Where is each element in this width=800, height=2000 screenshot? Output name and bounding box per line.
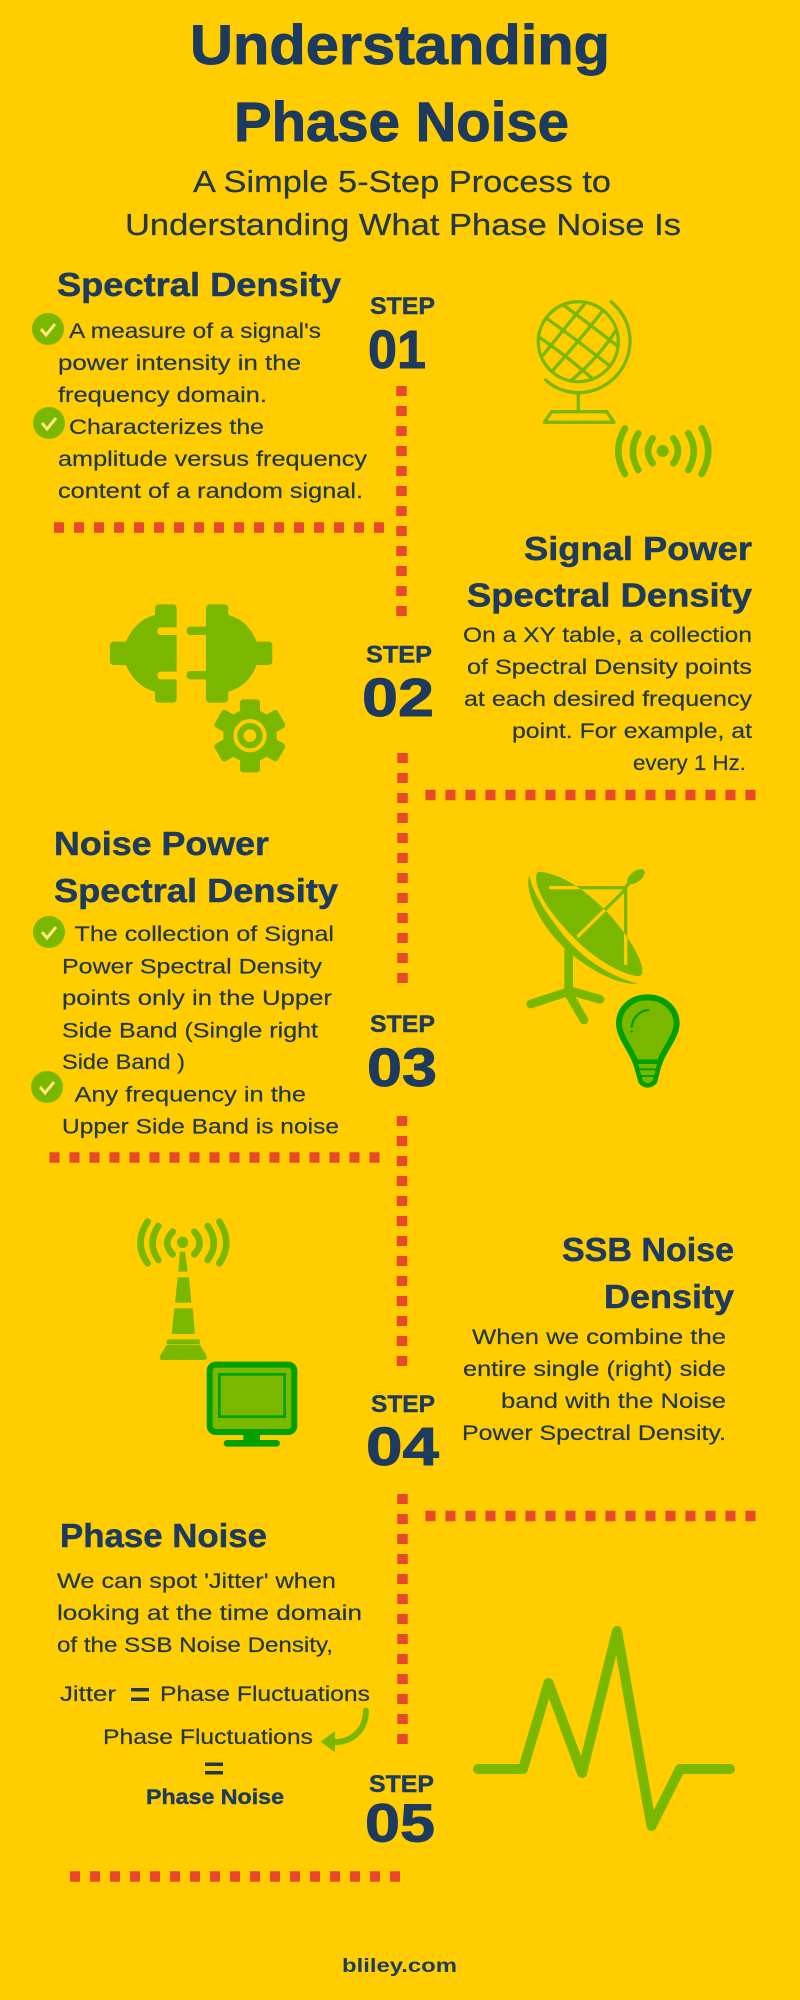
step 04 label: 04 (366, 1417, 439, 1477)
title: Phase Noise (234, 90, 569, 153)
equation: jitter equals phase fluctuations (60, 1683, 370, 1706)
text: step 4 body (462, 1326, 726, 1445)
arrow: curved green (322, 1711, 366, 1751)
heading: ssb noise density (562, 1231, 735, 1315)
step 02 label: 02 (362, 668, 434, 728)
step 04 label (366, 1391, 439, 1477)
step 05 label (365, 1771, 435, 1854)
step 02 label: STEP (366, 642, 432, 668)
text: step 3 body: Power Spectral Density (62, 956, 323, 978)
title: Understanding (190, 13, 610, 76)
step 02 label (362, 642, 434, 728)
icon: light bulb (619, 997, 677, 1085)
text: step 2 body (463, 624, 753, 775)
step 04 label: STEP (371, 1391, 435, 1418)
step 01 label: STEP (370, 293, 435, 320)
text: step 4 body: band with the Noise (501, 1390, 726, 1413)
text: step 2 body: at each desired frequency (464, 688, 753, 711)
text: step 2 body: On a XY table, a collection (463, 624, 752, 647)
text: step 1 body: frequency domain. (58, 384, 267, 407)
icon: pulse line (478, 1631, 730, 1826)
text: step 1 body: amplitude versus frequency (58, 448, 368, 471)
panel: step 2 signal power spectral density (110, 530, 753, 775)
text: step 5 body: We can spot 'Jitter' when (57, 1570, 336, 1593)
text: step 5 body: of the SSB Noise Density, (57, 1634, 333, 1657)
heading: ssb noise density: SSB Noise (562, 1231, 734, 1268)
heading: signal power spectral density (467, 530, 753, 614)
text: step 3 body (62, 923, 339, 1138)
text: step 2 body: every 1 Hz. (633, 752, 746, 775)
icon: globe (538, 302, 630, 422)
icon: check 1 (32, 313, 64, 345)
icon: check 3 (33, 916, 65, 948)
step 01 label (368, 293, 435, 380)
equation: jitter equals phase fluctuations: Phase Fluctuations (160, 1683, 370, 1706)
equation: jitter equals phase fluctuations: Jitter (60, 1683, 116, 1706)
heading: signal power spectral density: Spectral Density (467, 576, 753, 614)
icon: monitor (210, 1365, 294, 1447)
text: step 4 body: Power Spectral Density. (462, 1422, 726, 1445)
icon: radio tower (140, 1222, 226, 1360)
equation: phase fluctuations equals phase noise: Phase Noise (146, 1786, 284, 1809)
text: step 1 body: content of a random signal. (58, 480, 363, 503)
text: step 2 body: point. For example, at (512, 720, 752, 743)
text: step 1 body: Characterizes the (69, 416, 264, 439)
footer: website: bliley.com (342, 1956, 457, 1977)
heading: signal power spectral density: Signal Power (524, 530, 752, 567)
title (190, 13, 610, 153)
step 05 label: STEP (369, 1771, 434, 1798)
text: step 3 body: points only in the Upper (62, 987, 332, 1010)
text: step 1 body: A measure of a signal's (69, 320, 321, 343)
text: step 2 body: of Spectral Density points (467, 656, 752, 679)
text: step 4 body: When we combine the (472, 1326, 726, 1349)
step 05 label: 05 (365, 1794, 435, 1854)
step 03 label: STEP (370, 1011, 435, 1038)
text: step 1 body: power intensity in the (58, 352, 301, 375)
step 01 label: 01 (368, 320, 426, 380)
panel: step 1 spectral density (32, 266, 708, 503)
panel: step 4 ssb noise density (140, 1222, 735, 1477)
heading: phase noise: Phase Noise (60, 1517, 267, 1554)
step 03 label: 03 (367, 1038, 437, 1098)
text: step 4 body: entire single (right) side (463, 1358, 726, 1381)
icon: satellite dish (528, 866, 647, 1020)
text: step 3 body: The collection of Signal (74, 923, 334, 946)
heading: spectral density: Spectral Density (57, 266, 342, 303)
text: step 3 body: Side Band ) (62, 1051, 185, 1074)
text: step 5 body (57, 1570, 362, 1657)
text: step 3 body: Side Band (Single right (62, 1020, 318, 1042)
subtitle: A Simple 5-Step Process to (193, 164, 611, 199)
step 03 label (367, 1011, 437, 1098)
icon: plug connector (110, 604, 272, 703)
panel: step 5 phase noise (57, 1517, 730, 1854)
icon: signal waves (618, 428, 708, 474)
icon: check 2 (33, 407, 65, 439)
panel: step 3 noise power spectral density (31, 825, 677, 1138)
heading: noise power spectral density: Spectral Density (54, 872, 339, 909)
text: step 1 body (58, 320, 368, 503)
subtitle (125, 164, 681, 242)
equation: phase fluctuations equals phase noise (103, 1726, 313, 1809)
text: step 5 body: looking at the time domain (57, 1602, 362, 1625)
heading: ssb noise density: Density (604, 1278, 735, 1315)
heading: noise power spectral density: Noise Power (54, 825, 269, 862)
icon: check 4 (31, 1071, 63, 1103)
text: step 3 body: Any frequency in the (74, 1084, 306, 1106)
icon: gear (213, 699, 286, 772)
heading: noise power spectral density (54, 825, 339, 909)
equation: phase fluctuations equals phase noise: Phase Fluctuations (103, 1726, 313, 1749)
subtitle: Understanding What Phase Noise Is (125, 207, 681, 242)
text: step 3 body: Upper Side Band is noise (62, 1116, 339, 1138)
